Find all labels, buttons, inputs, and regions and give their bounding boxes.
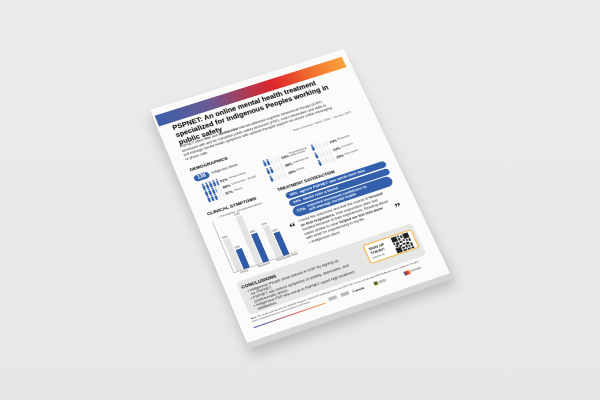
conclusions list: posttraumatic stress.: [253, 288, 289, 303]
footnote: clients completed measures at pre-treatment and 8 weeks.: [252, 300, 311, 323]
clinical symptoms heading: CLINICAL SYMPTOMS: [206, 196, 257, 216]
icon row: women: Women: [234, 187, 243, 191]
intro text: developed with and for Canadian public safety personnel (PSP). Learn information and skills to: [181, 104, 327, 153]
client label: Indigenous clients: [211, 163, 238, 175]
icon row: nursing: [269, 166, 305, 182]
sign-up text: TODAY!: [370, 246, 385, 255]
anxiety bars: Anxiety: [240, 269, 249, 274]
sign-up text: SIGN UP: [368, 242, 385, 251]
icon row: women: [206, 187, 243, 202]
pill: confidence: reported increased confidence to: [306, 184, 367, 208]
icon row: paramedics: 24%: [329, 138, 338, 144]
footnote: Note: This study used data from the PSPNET Program, funded PSP Wellbeing Course and PSP-PTSD Course and all guided PSP Wellbeing Course. Indigenous Peoples': [251, 260, 419, 320]
chart legend: ■ Pre-treatment ■ 8-week post-treatment: [218, 202, 262, 218]
logo: Saskatchewan wordmark: [378, 279, 386, 284]
logo: PSPNET: [403, 266, 422, 276]
anxiety bars: 53%: [222, 235, 228, 240]
icon row: communities: 66%: [222, 183, 231, 190]
quote text: with what I'm experiencing in my life.: [305, 217, 366, 240]
quote text: I loved the resources and that the course is focused: [298, 191, 383, 223]
quote text: cases similar to mine helped me feel less alone: [303, 206, 384, 236]
panel: demographics: [189, 134, 358, 202]
logo: Saskatchewan crest: [373, 281, 378, 286]
satisfaction pills: [286, 161, 393, 217]
client count badge: [193, 171, 211, 182]
conclusions list: satisfaction.: [257, 300, 278, 311]
logo: Canada: Canada: [352, 286, 365, 293]
panel: conclusions: [236, 223, 426, 315]
depression bars: Depression: [258, 262, 271, 268]
pill: confidence: 77%: [296, 206, 307, 213]
conclusions list: • Indigenous People show interest in ICBT by signing up: [247, 258, 339, 293]
icon row: corrections: [314, 142, 353, 159]
icon row: public servants: [262, 147, 307, 166]
pill: confidence: [291, 175, 394, 218]
posttraumatic stress bars: 57%: [261, 222, 268, 227]
posttraumatic stress bars: Posttraumatic stress: [276, 252, 298, 262]
conclusions list: • PSPNET can reduce symptoms of anxiety, depression, and: [250, 263, 350, 300]
gradient footer line: [253, 302, 326, 328]
posttraumatic stress bars: 41%: [272, 228, 278, 233]
icon row: corrections: 22%: [332, 146, 341, 152]
sign-up callout: [362, 229, 420, 264]
icon row: public servants: Provincial/federal: [289, 147, 307, 155]
icon row: corrections: Corrections: [341, 142, 353, 148]
pill: refer a friend: 94% would refer a friend: [292, 186, 339, 204]
icon row: communities: Communities < 100,000: [231, 175, 256, 185]
chart axis: [212, 223, 234, 273]
posttraumatic stress bars: [261, 222, 298, 262]
icon row: actively working: Actively working: [229, 172, 246, 179]
sign-up text: [368, 242, 385, 255]
icon row: actively working: 91%: [219, 177, 229, 183]
sign-up url: pspnet.ca: [372, 253, 385, 260]
intro text: PSPNET offers free and confidential internet-delivered cognitive behavioural therapy (ICBT): [180, 101, 322, 149]
logo: grey partner marks: [328, 291, 350, 301]
icon row: leadership: [266, 157, 309, 174]
gradient header band: [155, 57, 347, 126]
depression bars: 44%: [250, 230, 256, 234]
quote: [288, 191, 404, 245]
depression bars: [234, 212, 271, 268]
icon row: actively working: [202, 172, 246, 190]
client count badge: 138: [196, 173, 207, 180]
icon row: communities: [204, 175, 256, 196]
pill: confidence: self-manage mental health: [308, 192, 357, 211]
title: specialized for Indigenous Peoples working in: [174, 83, 330, 139]
treatment satisfaction heading: TREATMENT SATISFACTION: [277, 169, 335, 192]
intro text: self-manage mental health symptoms with optional therapist support via secure online messaging: [183, 106, 332, 157]
pill: worth their time: [285, 160, 387, 200]
conclusions list: [247, 258, 355, 311]
page: [150, 49, 450, 343]
demographics heading: DEMOGRAPHICS: [189, 156, 229, 172]
conclusions heading: CONCLUSIONS: [240, 273, 277, 290]
icon: QR code: [390, 232, 414, 254]
quote text: on first responders. First responders often feel: [300, 198, 378, 227]
pill: refer a friend: [288, 168, 391, 207]
logo: PSPNET: PSPNET: [410, 267, 422, 273]
icon row: paramedics: Paramedics: [337, 134, 350, 140]
icon row: public servants: public servants: [290, 150, 306, 157]
quote text: [298, 191, 389, 245]
anxiety bars: [222, 235, 250, 274]
icon row: nursing: 26%: [287, 169, 297, 175]
quote text: —Indigenous client: [307, 230, 340, 245]
icon row: public servants: 54%: [281, 154, 290, 160]
data collection date: Data Collection: March 2020 – January 2025: [293, 111, 352, 132]
depression bars: 67%: [234, 212, 240, 217]
title: public safety: [177, 125, 223, 146]
icon row: leadership: Leadership role: [293, 157, 309, 164]
icon row: women: 57%: [225, 189, 234, 196]
conclusions list: for PSPNET.: [250, 285, 273, 296]
quote text: isolated because of their experiences. Reading about: [302, 199, 389, 232]
icon row: leadership: 36%: [284, 161, 293, 168]
icon row: nursing: Nursing: [296, 166, 305, 171]
icon row: other sectors: 25%: [336, 153, 345, 159]
icon row: other sectors: [318, 149, 358, 166]
icon row: other sectors: Other sectors: [344, 149, 358, 155]
title: PSPNET: An online mental health treatment: [171, 79, 317, 131]
pill: worth their time: 96% agreed PSPNET was worth their time: [289, 168, 366, 197]
funder logos: [328, 266, 422, 302]
icon row: paramedics: [310, 134, 350, 151]
quote mark left: “: [288, 220, 299, 234]
anxiety bars: 31%: [234, 245, 240, 250]
bar chart: clinical symptoms: [212, 212, 298, 274]
conclusions list: • Indigenous PSP who enroll in PSPNET report high treatment: [253, 269, 355, 308]
intro text: or phone calls.: [185, 151, 209, 161]
quote mark right: ”: [393, 200, 404, 214]
